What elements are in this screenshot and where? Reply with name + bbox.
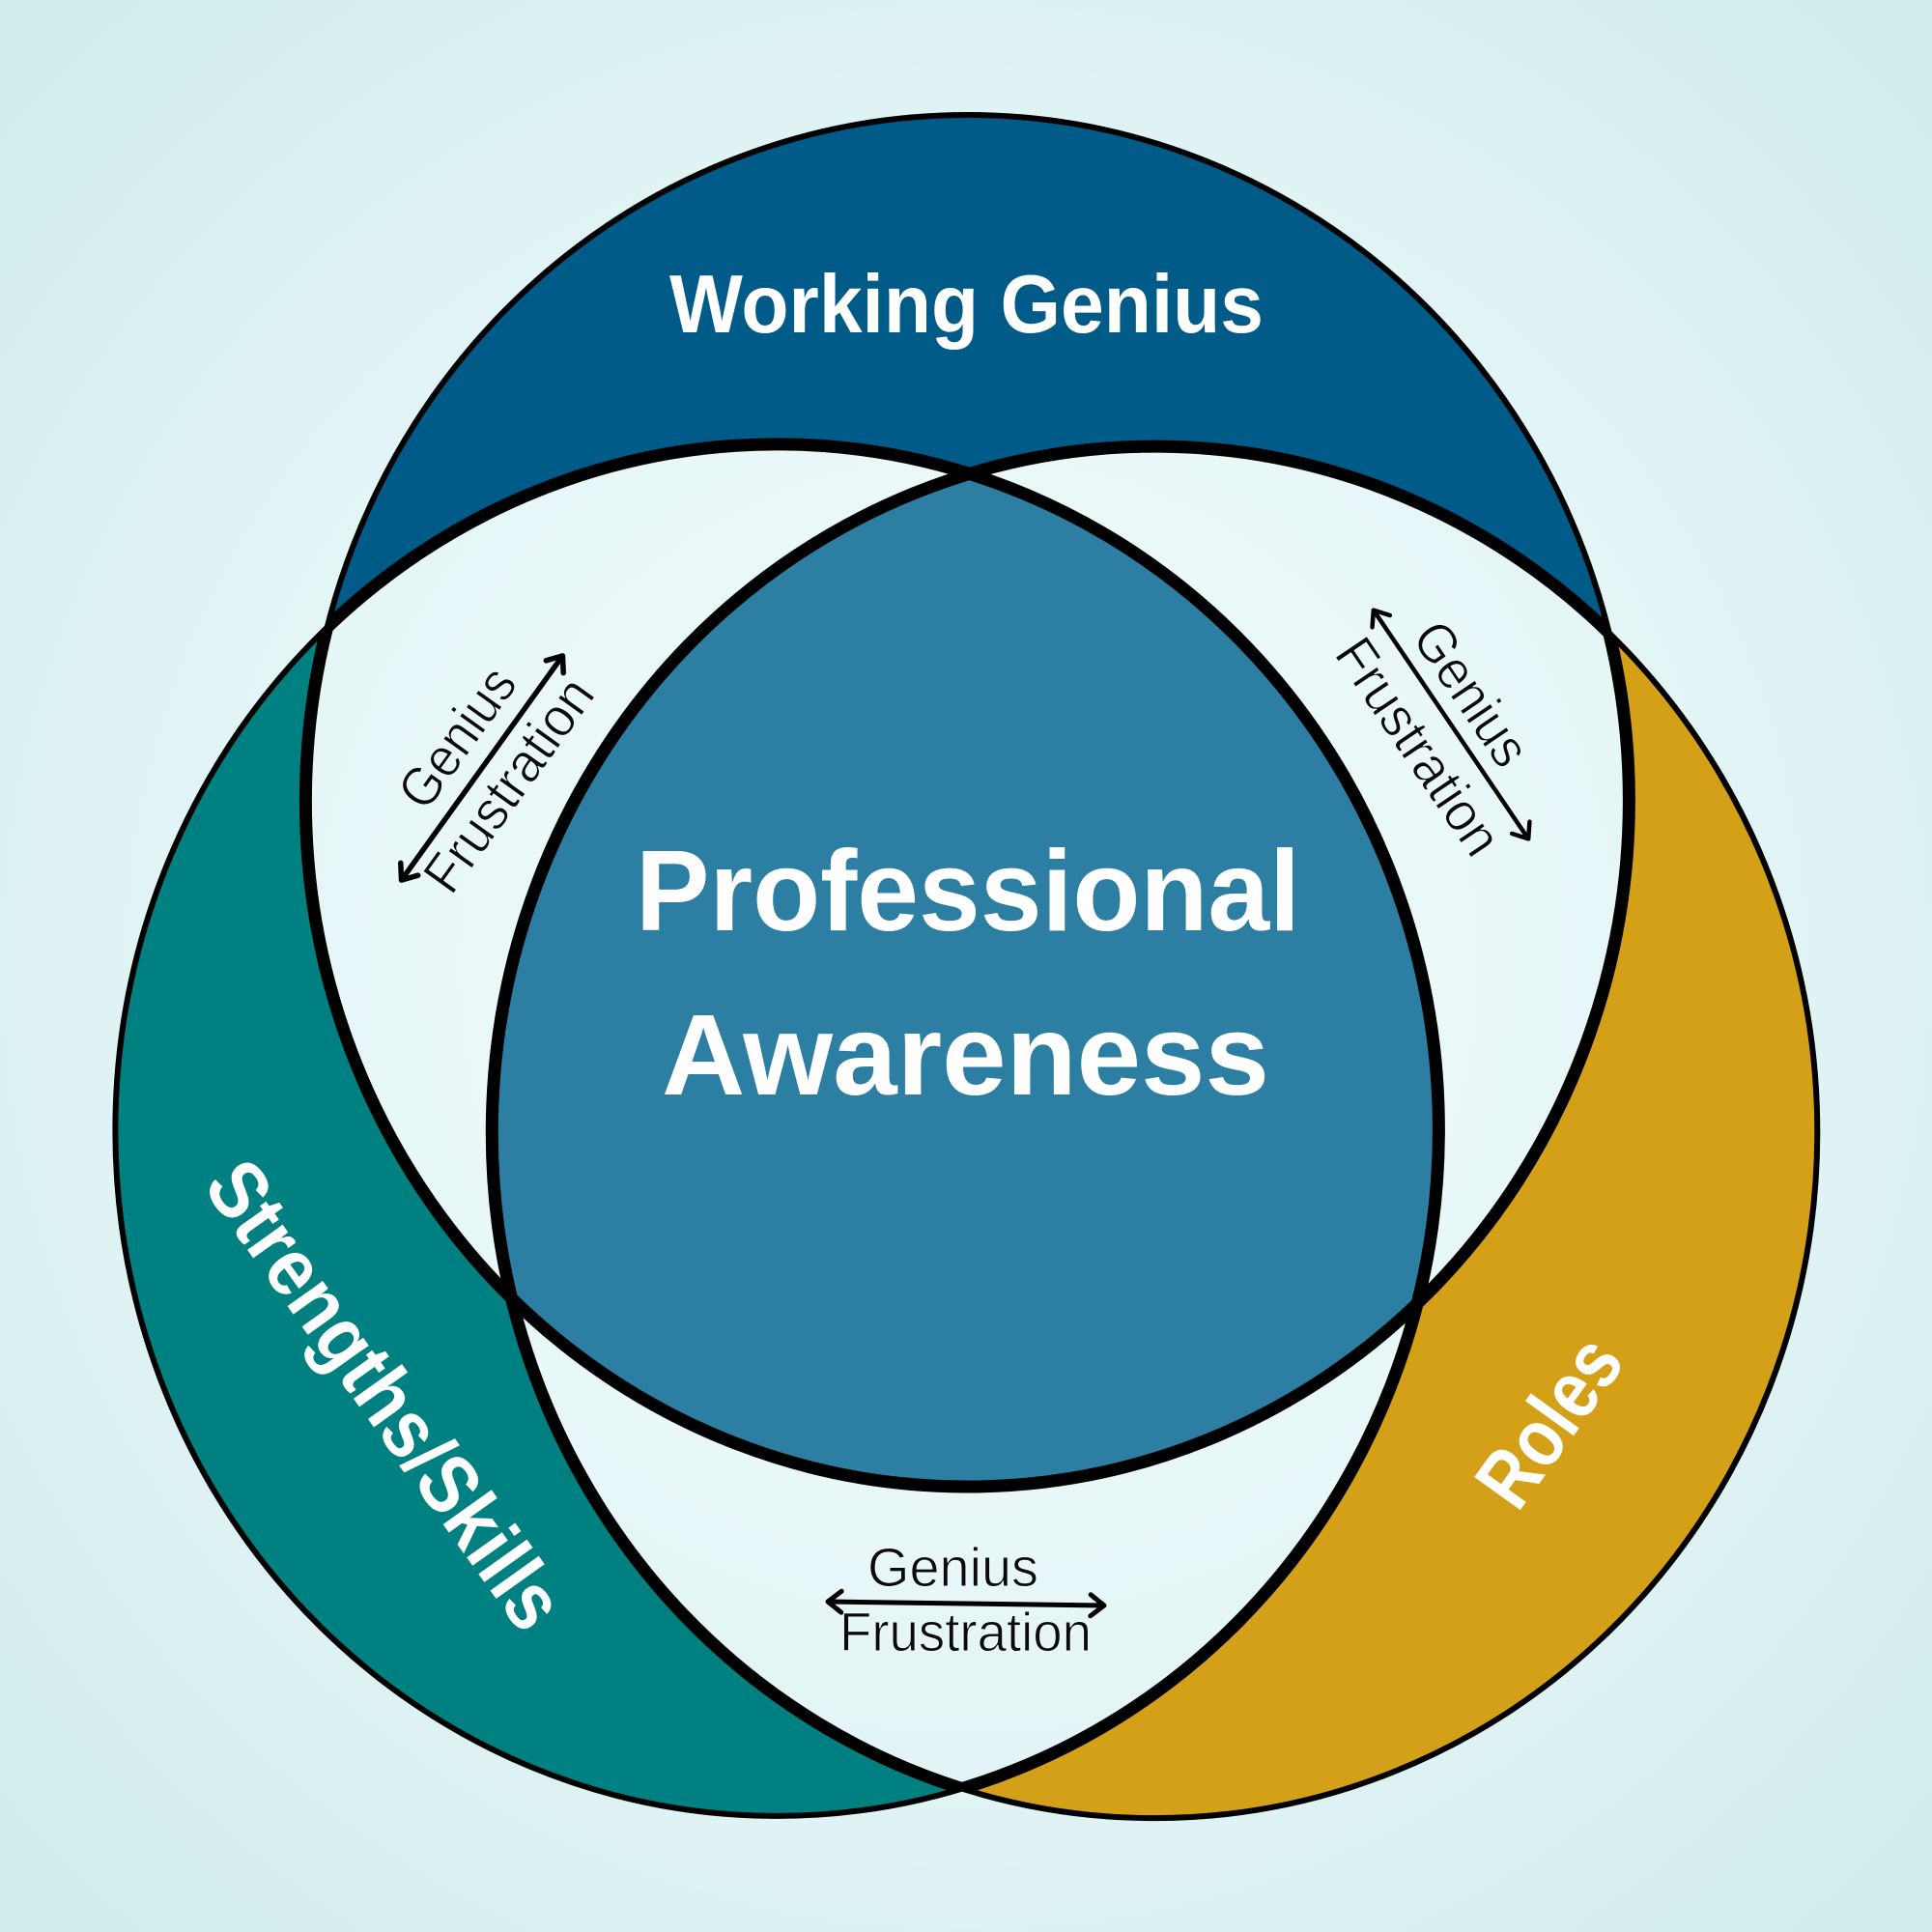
arrow: right scale [1365, 604, 1537, 845]
title: professional awareness: Awareness [662, 991, 1269, 1120]
title: professional awareness: Professional [636, 827, 1300, 955]
text: frustration: Frustration [1322, 626, 1514, 867]
text: genius: Genius [385, 655, 529, 820]
scale: genius to frustration, left [346, 615, 613, 917]
label: roles: Roles [1458, 1320, 1641, 1524]
overlap: working genius and strengths [311, 450, 949, 1279]
circle outlines [111, 110, 1823, 1822]
center overlap: professional awareness [498, 480, 1433, 1480]
scale: genius to frustration, right [1315, 574, 1582, 878]
overlap: working genius and roles [991, 452, 1623, 1284]
text: genius: Genius [1401, 610, 1542, 778]
arrow: left scale [393, 649, 571, 887]
circle: working genius [301, 111, 1633, 1491]
label: strengths and skills: Strengths/Skills [187, 1144, 582, 1647]
arrow: bottom scale [828, 1591, 1104, 1616]
circle: roles [488, 442, 1821, 1822]
scale: genius to frustration, bottom [827, 1534, 1105, 1667]
text: frustration: Frustration [412, 666, 607, 904]
text: frustration: Frustration [839, 1602, 1092, 1663]
text: genius: Genius [867, 1537, 1038, 1599]
venn circles [111, 110, 1823, 1822]
circle: strengths and skills [111, 440, 1442, 1820]
label: working genius: Working Genius [669, 259, 1264, 351]
overlap: strengths and roles [524, 1318, 1406, 1782]
title: professional awareness [636, 827, 1300, 1120]
